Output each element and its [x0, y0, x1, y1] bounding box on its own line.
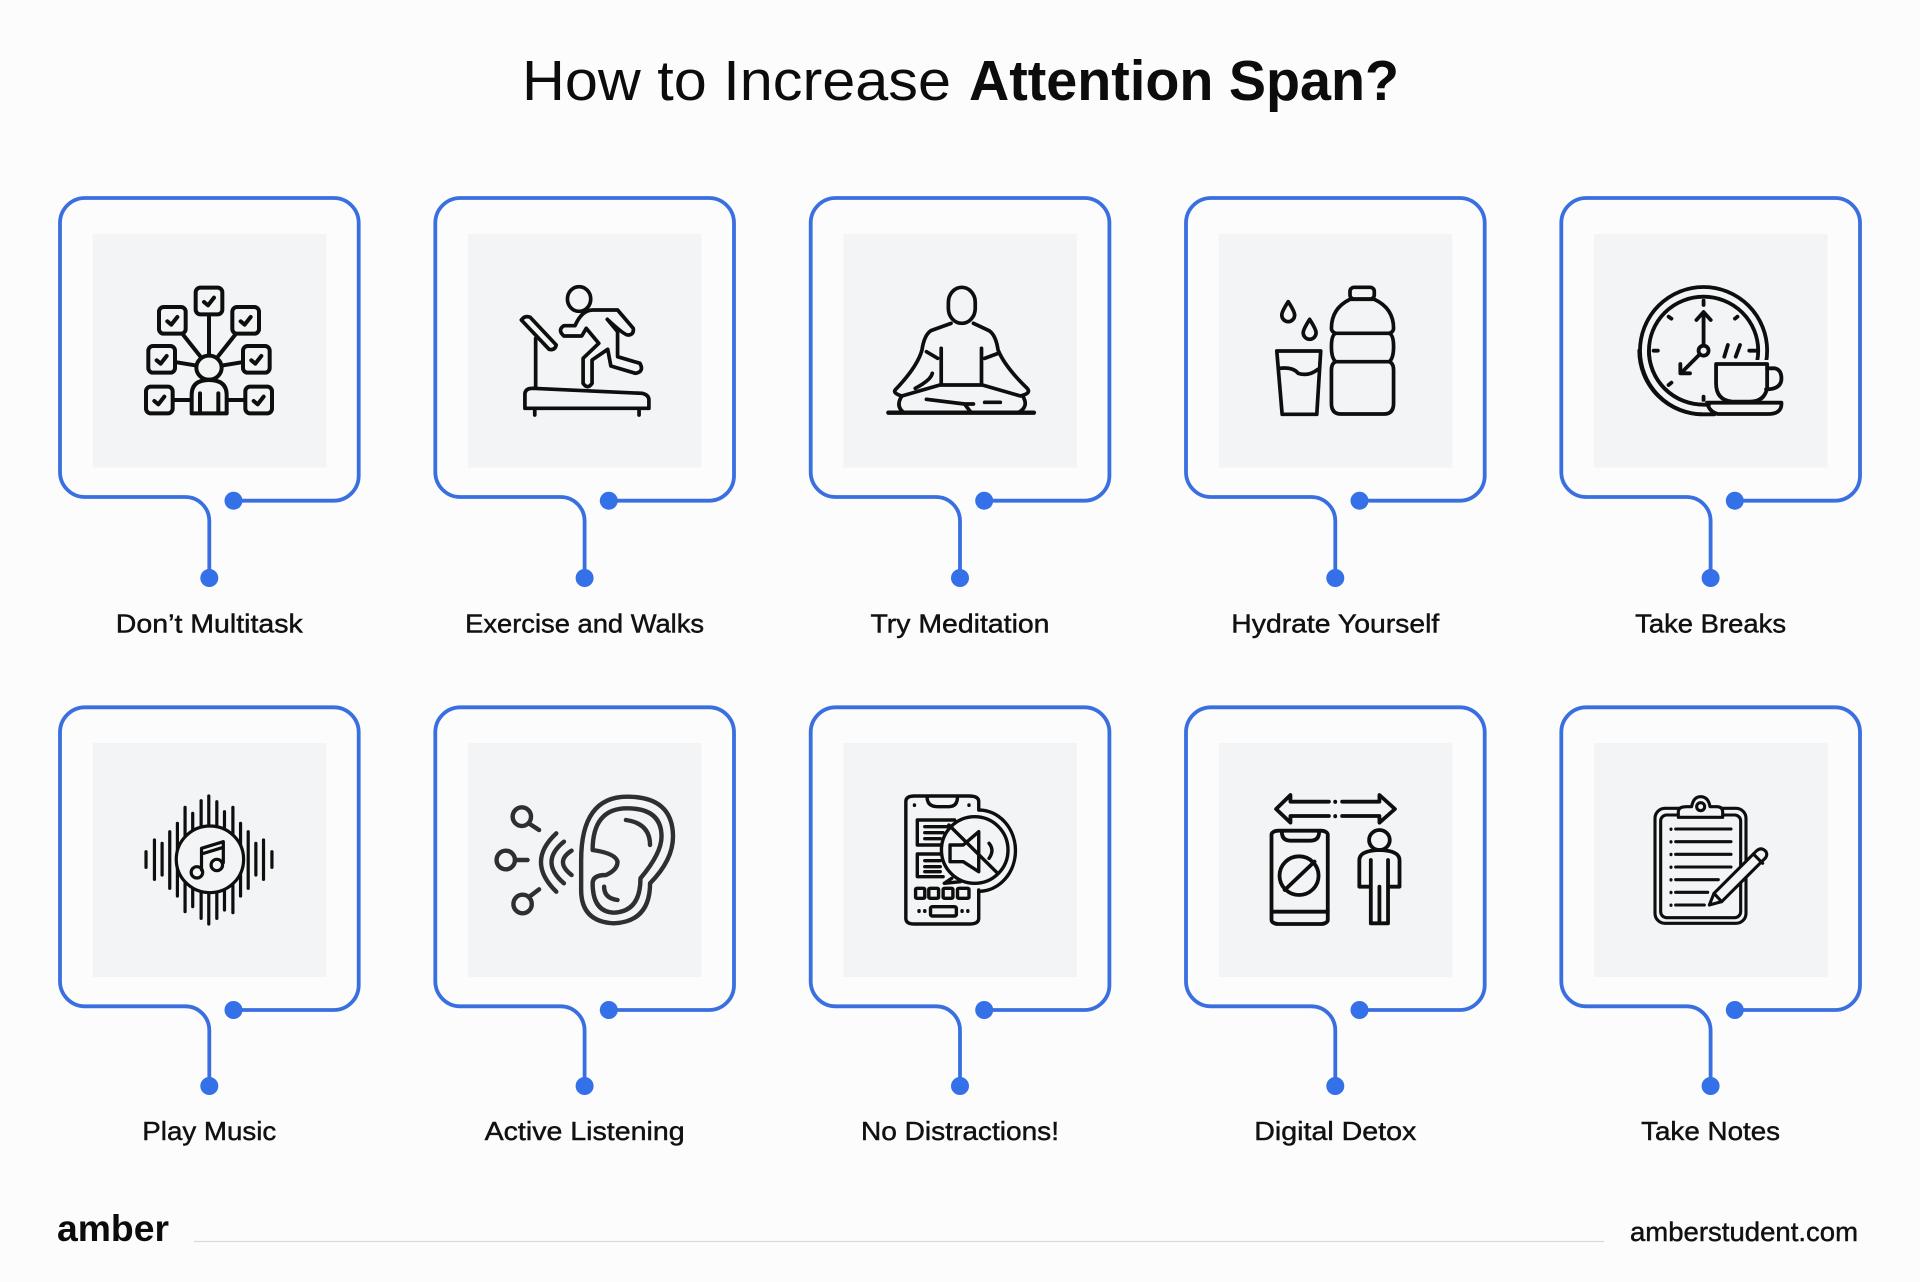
label: Play Music	[142, 1116, 276, 1146]
icon tile	[468, 743, 702, 977]
icon: muted phone	[906, 796, 1015, 924]
card: No Distractions!	[811, 707, 1109, 1146]
icon: treadmill runner	[521, 287, 649, 415]
card: Hydrate Yourself	[1186, 198, 1485, 639]
connector frame	[1186, 198, 1485, 587]
connector frame	[811, 707, 1109, 1095]
connector frame	[1186, 707, 1485, 1095]
icon tile	[1219, 743, 1452, 977]
label: Take Notes	[1641, 1116, 1780, 1146]
footer website: amberstudent.com	[1630, 1217, 1858, 1247]
label: Exercise and Walks	[465, 609, 704, 639]
connector frame	[60, 198, 359, 587]
icon: meditating person	[888, 287, 1034, 413]
icon: music sound wave	[146, 796, 272, 924]
card: Active Listening	[435, 707, 734, 1146]
card: Don't Multitask	[60, 198, 359, 639]
icon tile	[468, 234, 702, 468]
label: Active Listening	[485, 1116, 685, 1146]
icon: phone, person and distance arrows	[1272, 795, 1400, 924]
card: Exercise and Walks	[435, 198, 734, 639]
icon tile	[93, 234, 326, 468]
connector frame	[1561, 707, 1860, 1095]
title: Attention Span?	[969, 49, 1399, 113]
icon tile	[1219, 234, 1452, 468]
card: Digital Detox	[1186, 707, 1485, 1146]
icon: water glass and bottle	[1277, 287, 1394, 414]
footer logo: amber: amber	[57, 1208, 169, 1249]
title: How to Increase	[522, 49, 951, 113]
connector frame	[435, 707, 734, 1095]
label: Don’t Multitask	[116, 609, 304, 639]
icon tile	[1594, 743, 1828, 977]
icon tile	[843, 234, 1077, 468]
label: Digital Detox	[1254, 1116, 1416, 1146]
card: Take Breaks	[1561, 198, 1860, 639]
icon: person with many tasks	[146, 288, 272, 413]
icon tile	[93, 743, 326, 977]
label: No Distractions!	[861, 1116, 1059, 1146]
label: Take Breaks	[1635, 609, 1786, 639]
connector frame	[811, 198, 1109, 587]
icon: clipboard and pencil	[1655, 797, 1767, 923]
connector frame	[435, 198, 734, 587]
card: Take Notes	[1561, 707, 1860, 1146]
icon tile	[843, 743, 1077, 977]
card: Try Meditation	[811, 198, 1109, 639]
card: Play Music	[60, 707, 359, 1146]
connector frame	[60, 707, 359, 1095]
icon: clock and coffee cup	[1639, 287, 1786, 417]
title	[522, 49, 1399, 113]
label: Try Meditation	[870, 609, 1050, 639]
icon: ear and sound	[497, 797, 673, 923]
label: Hydrate Yourself	[1231, 609, 1440, 639]
icon tile	[1594, 234, 1828, 468]
connector frame	[1561, 198, 1860, 587]
